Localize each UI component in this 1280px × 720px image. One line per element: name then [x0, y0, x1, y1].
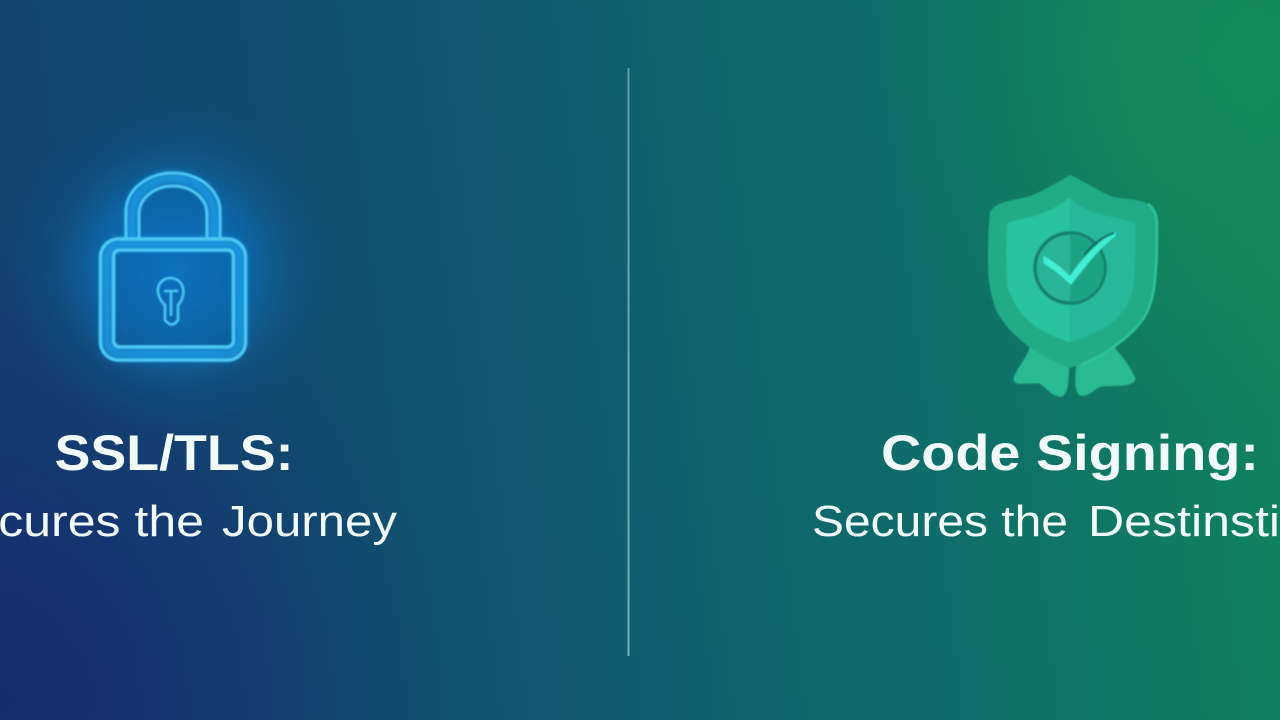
check mark: [1043, 232, 1116, 285]
outer shield: [988, 175, 1157, 368]
icon: glowing padlock: [8, 98, 338, 438]
inner shield shade: [1070, 199, 1135, 342]
heading: SSL/TLS: SSL/TLS:: [54, 425, 294, 481]
panel: SSL/TLS: [0, 98, 397, 546]
seal half shade: [1070, 234, 1104, 302]
subheading: Secures the Journey: Journey: [222, 497, 397, 546]
subheading: Secures the Journey: [0, 497, 397, 546]
panel: Code Signing: [812, 175, 1280, 546]
icon: shield with check: [988, 175, 1157, 395]
subheading: Secures the Destination: Destinsti: [1088, 497, 1280, 546]
inner shield: [1006, 198, 1135, 342]
vertical divider: [628, 68, 630, 656]
check tip shadow: [1084, 233, 1114, 255]
subheading: Secures the Destination: [812, 497, 1280, 546]
ribbon tails: [1015, 345, 1134, 395]
shield right edge highlight: [1082, 204, 1157, 364]
heading: Code Signing: Code Signing:: [881, 425, 1259, 481]
subheading: Secures the Destination: Secures the: [812, 497, 1068, 546]
seal circle: [1035, 233, 1105, 303]
